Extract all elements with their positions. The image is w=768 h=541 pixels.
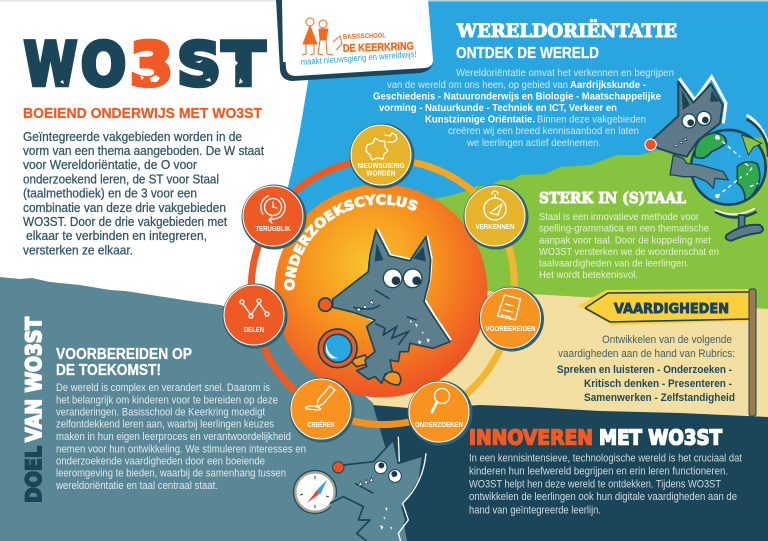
text block: wereldoriëntatie: Kunstzinnige Oriëntatie. [425,114,535,126]
text block: intro: elkaar te verbinden en integreren, [26,229,207,243]
node: terugblik [242,184,306,250]
text block: vaardigheden: Samenwerken - Zelfstandigheid [584,392,735,404]
text block: intro: (taalmethodiek) en de 3 voor een [23,186,197,200]
logo: children figures [302,18,342,55]
icon: puzzle [366,133,397,160]
text block: staal: aanpak voor taal. Door de koppeling met [539,234,711,246]
text block: voorbereiden: leeromgeving te bieden, waarbij de samenhang tussen [56,468,286,480]
text block: innoveren: WO3ST helpt hen deze wereld te ontdekken. Tijdens WO3ST [469,478,721,490]
text block: wereldoriëntatie: vorming - Natuurkunde - Techniek en ICT, Verkeer en [379,102,617,114]
text block: vaardigheden: Kritisch denken - Presenteren - [584,378,732,390]
text block: wereldoriëntatie: van de wereld om ons heen, op gebied van [387,79,568,91]
text block: voorbereiden: het belangrijk om kinderen voor te bereiden op deze [56,394,278,406]
wolf outline [330,440,423,541]
wolf body [333,230,450,383]
text block: intro: combinatie van deze drie vakgebieden [23,201,226,215]
text block: vaardigheden: Spreken en luisteren - Onderzoeken - [557,364,732,376]
text block: staal: WO3ST versterken we de woordenschat en [539,246,719,258]
background: cream area [360,290,768,430]
background: navy area [373,405,768,541]
text block: innoveren: ontwikkelen de leerlingen ook hun digitale vaardigheden aan de [469,491,737,503]
illustration: wolf with compass [294,437,426,541]
text block: intro: onderzoekend leren, de ST voor Staal [23,172,219,186]
illustration: wolf with magnifier [318,228,452,385]
heading: innoveren met wo3st [469,426,722,450]
text block: innoveren: kinderen hun leefwereld begrijpen en erin leren functioneren. [469,465,728,477]
text block: innoveren: In een kennisintensieve, technologische wereld is het cruciaal dat [469,453,742,465]
text block: wereldoriëntatie: Wereldoriëntatie omvat het verkennen en begrijpen [456,67,674,79]
logo: school name: maakt nieuwsgierig en wereldwijs! [300,49,417,67]
icon: pencil [306,386,335,410]
vertical heading: doel van wo3st: DOEL [22,446,47,503]
logo: school name [300,32,417,67]
text block: intro [23,130,264,258]
magnifier [350,355,370,367]
text block: innoveren [469,453,742,516]
vertical heading: doel van wo3st: VAN WO3ST [22,317,47,442]
text block: intro: vorm van een thema aangeboden. De W staat [23,144,264,158]
text block: staal [539,211,719,281]
text block: vaardigheden: vaardigheden aan de hand van Rubrics: [558,348,735,360]
fur [375,317,417,345]
text block: wereldoriëntatie: we leerlingen actief deelnemen. [466,137,601,149]
text block: wereldoriëntatie: Geschiedenis - Natuuronderwijs en Biologie - Maatschappelijke [373,90,661,102]
background: green area [380,137,768,320]
text block: staal: Staal is een innovatieve methode voor [539,211,699,223]
title: WO3ST: S [177,30,221,100]
nose [319,298,332,311]
vertical heading: doel van wo3st [22,317,47,503]
eyes [383,269,402,288]
title: WO3ST: O [81,30,126,100]
logo: school name: BASISSCHOOL [343,32,387,41]
heading: sterk in staal: STERK IN (S)TAAL [539,189,686,207]
text block: voorbereiden: onderzoekende vaardigheden door een boeiende [56,455,265,467]
text block: voorbereiden: wereldoriëntatie en taal centraal staat. [55,480,218,492]
thumb [383,372,401,385]
text block: voorbereiden: nemen voor hun ontwikkeling. We stimuleren interesses en [56,443,306,455]
background: blue area [288,0,768,300]
text block: vaardigheden: Ontwikkelen van de volgende [602,334,732,346]
heading: innoveren met wo3st: MET WO3ST [599,426,722,450]
illustration: wolf with globe [645,77,768,241]
ears inner [375,243,426,262]
icon: share line [240,299,269,318]
cycle ring [251,160,514,425]
globe [691,130,766,205]
heading: wereldoriëntatie: WERELDORIËNTATIE [456,19,677,42]
logo card [276,0,433,81]
central circle: onderzoekscyclus: ONDERZOEKSCYCLUS [284,194,418,290]
logo: school name: DE KEERKRING [343,41,414,55]
icon: magnifying glass [432,388,450,412]
node: creëren: CREËREN [308,421,334,429]
globe stand [715,212,757,217]
heading: voorbereiden op de toekomst: VOORBEREIDEN OP [56,346,192,363]
compass [294,470,336,514]
text block: intro: WO3ST. Door de drie vakgebieden met [23,215,227,229]
node: nieuwsgierig worden [350,124,414,188]
text block: staal: taalvaardigheden van de leerlingen. [539,258,689,270]
node: verkennen: VERKENNEN [476,224,514,231]
icon: compass globe [484,191,506,220]
text block: wereldoriëntatie: creëren wij een breed kennisaanbod en laten [448,125,639,137]
text block: intro: versterken ze elkaar. [23,244,133,258]
title: WO3ST: W [24,30,77,100]
node: delen: DELEN [244,327,264,334]
mouth and teeth [353,290,389,309]
text block: staal: spelling-grammatica en een thematische [539,223,709,235]
heading: wereldoriëntatie [456,19,677,62]
signpost: vaardigheden: VAARDIGHEDEN [614,301,729,317]
text block: voorbereiden [55,382,306,492]
icon: clock [261,196,285,223]
node: nieuwsgierig worden: NIEUWSGIERIG [358,163,405,170]
text block: voorbereiden: De wereld is complex en verandert snel. Daarom is [56,382,270,394]
background: teal area [0,277,407,541]
central circle: onderzoekscyclus [274,185,488,398]
wolf paw [670,155,728,188]
text block: intro: Geïntegreerde vakgebieden worden in de [23,130,242,144]
text block: voorbereiden: veranderingen. Basisschool de Keerkring moedigt [56,407,265,419]
text block: wereldoriëntatie: Binnen deze vakgebieden [537,114,646,126]
nose [645,139,656,150]
node: nieuwsgierig worden: WORDEN [366,170,396,178]
node: onderzoeken [408,380,472,446]
text block: innoveren: hand van geïntegreerde leerlijn. [469,504,601,516]
text block: wereldoriëntatie [373,67,674,149]
text block: staal: Het wordt betekenisvol. [539,269,638,281]
title: WO3ST: T [222,30,265,100]
node: delen [222,284,288,348]
heading: wereldoriëntatie: ONTDEK DE WERELD [456,45,599,62]
text block: wereldoriëntatie: Aardrijkskunde - [570,79,646,91]
eyes [682,114,696,128]
signpost: vaardigheden [578,289,756,416]
icon: checklist [498,295,520,320]
node: voorbereiden: VOORBEREIDEN [486,326,536,333]
wolf head [650,82,723,157]
heading: voorbereiden op de toekomst: DE TOEKOMST! [56,362,161,379]
node: onderzoeken: ONDERZOEKEN [415,422,463,429]
text block: voorbereiden: maken in hun eigen leerproces en verantwoordelijkheid [56,431,291,443]
node: terugblik: TERUGBLIK [256,226,290,233]
title: WO3ST [24,30,265,100]
text block: intro: voor Wereldoriëntatie, de O voor [23,158,197,172]
heading: voorbereiden op de toekomst [56,346,192,379]
node: voorbereiden [479,286,544,352]
node: verkennen [464,184,528,250]
text block: vaardigheden [557,334,735,404]
title: WO3ST: 3 [130,30,173,100]
heading: innoveren met wo3st: INNOVEREN [469,426,593,450]
node: creëren [290,378,354,442]
text block: voorbereiden: zelfontdekkend leren aan, waarbij leerlingen keuzes [56,419,274,431]
heading: boeiend onderwijs: BOEIEND ONDERWIJS MET WO3ST [23,106,262,122]
